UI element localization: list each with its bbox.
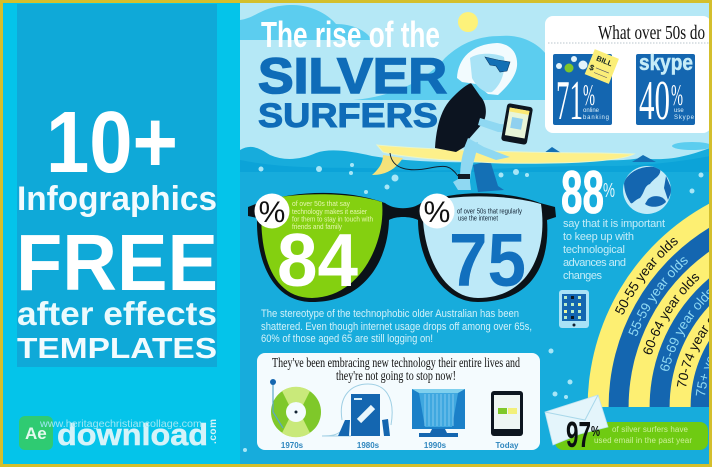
card background [553,54,612,125]
icon: CRT monitor [412,389,465,437]
glasses frame [248,193,556,302]
green pill [555,422,708,450]
band label: 50-55: 50-55 year olds [614,238,678,314]
percent sign: % [603,180,615,202]
chart: glasses statistics [248,193,556,302]
sky background [240,3,710,168]
title line: SILVER: SILVER [258,48,447,104]
rainbow bands [588,204,709,407]
right earphone [382,419,390,436]
leash cord [390,153,458,176]
panel: what over 50s do [545,16,711,133]
panel: water [240,142,712,465]
note paper [585,49,619,84]
cloud left [240,5,372,40]
icon: bill note [585,49,619,84]
promo text: after effects: after effects [17,295,217,332]
online label: online [583,108,600,114]
note heading: BILL [595,54,614,68]
value: 88: 88 [561,159,604,226]
left earphone [338,420,350,436]
card: skype: % [671,77,683,112]
fin [372,155,403,175]
headphone band [341,384,392,425]
globe ocean [623,166,671,214]
panel: promo [16,4,218,367]
globe land [624,167,672,207]
tablet body [491,391,523,436]
caption: to keep up with [563,231,634,243]
panel: technology timeline [257,353,540,450]
title [258,14,447,135]
Ae letters: Ae [25,424,47,443]
promo text: templates: TEMPLATES [17,333,217,365]
right percent badge [420,194,454,229]
panel background [545,16,711,133]
player clip [359,407,373,421]
wave peak right [632,155,656,162]
40 value: 40 [639,70,670,132]
caption: say that it is important [563,218,665,230]
left lens: green [261,194,382,298]
watermark url: www.heritagechristiancollage.com [39,419,202,430]
.com text: .com [208,419,219,444]
email caption [594,425,692,445]
right lens caption [457,206,522,222]
player body [351,394,380,436]
tablet green cell [498,408,507,414]
hand-held tablet [501,103,533,145]
left lens caption [292,199,373,231]
text block: stereotype: The stereotype of the technophobic older Australian has been [261,308,519,320]
darker wave band [240,156,710,172]
tone arm [273,382,283,428]
card: online banking: % [583,77,595,112]
banking label: banking [583,115,609,121]
logo: Ae download [19,416,219,452]
far leg [473,160,504,192]
title line: The rise of the: The rise of the [261,14,440,55]
label: 1990s: 1990s [424,441,447,450]
tablet screen [562,294,586,321]
label: today: Today [496,441,519,450]
tablet image [510,117,523,130]
cloud behind surfer [353,36,546,100]
download wordmark: download [57,417,208,452]
card: skype [636,50,695,132]
left lens caption: for them to stay in touch with [292,214,373,224]
tablet yellow cell [508,408,517,414]
promo text: Infographics: Infographics [17,180,217,218]
badge circle [420,194,454,228]
decorative dots [556,56,588,72]
card: online banking: 71 [556,70,583,132]
email caption: used email in the past year [594,436,692,445]
stat: 88 percent [561,159,672,282]
text block: stereotype: 60% of those aged 65 are still logging on! [261,333,433,345]
headphone cable [322,428,351,436]
player label [354,398,362,400]
near leg [453,142,478,190]
band label: 55-59: 55-59 year olds [628,257,688,336]
icon: cassette player [322,384,392,436]
card: online banking [553,49,619,132]
left lens caption: technology makes it easier [292,207,367,216]
monitor vents [425,394,453,426]
caption: changes [563,270,602,282]
record spindle [294,410,298,414]
panel background [257,353,540,450]
skype wordmark: skype [639,50,693,75]
monitor top edge [412,389,465,393]
note dollar: $ [588,63,596,73]
stat: email [545,395,708,455]
face [470,54,504,92]
caption: advances and [563,257,626,269]
badge symbol: % [259,196,285,229]
band label: 60-64: 60-64 year olds [643,274,700,354]
icon: tablet [491,391,523,436]
promo heading: 10+: 10+ [46,94,178,191]
promo heading: FREE: FREE [16,218,218,307]
right lens caption: use the internet [458,214,499,222]
badge circle [254,194,290,228]
card background [636,54,695,125]
monitor back [419,393,458,427]
promo backing block [17,4,217,367]
sunglasses [485,57,510,72]
record highlights [282,387,310,437]
label: 1980s: 1980s [357,441,380,450]
value: 97: 97 [566,414,591,455]
value: 75: 75 [449,218,526,302]
illustration: surfer [372,43,634,192]
wetsuit [435,83,486,152]
surfboard [377,145,634,163]
icon: sun [458,12,478,32]
tablet frame [559,290,589,328]
icon: vinyl record [270,379,321,437]
monitor stand [419,429,458,437]
skype label: Skype [674,115,695,121]
hair [457,43,517,95]
panel heading line 2: they're not going to stop now! [336,369,456,384]
badge symbol: % [424,196,450,229]
caption [563,218,665,282]
record centre [286,402,306,422]
panel: sky [240,3,710,168]
bubbles [243,163,704,452]
email caption: of silver surfers have [612,425,689,434]
monitor casing [412,389,465,429]
arm pivot [270,379,276,385]
record disc [271,387,321,437]
wave peak left [540,147,566,156]
tablet screen [494,395,520,429]
cloud wisp [672,142,712,150]
arm [478,118,528,133]
caption: technological [563,244,625,256]
value: 84: 84 [277,218,358,302]
label: 1970s: 1970s [281,441,304,450]
chart: age rainbow [588,204,709,407]
home button [572,324,576,326]
panel heading line 1: They've been embracing new technology their entire lives and [272,356,520,371]
tablet header [509,107,529,115]
right lens: pale blue [423,196,542,298]
icon: envelope [545,395,608,445]
icon: globe [623,166,672,214]
use label: use [674,108,684,114]
left lens caption: friends and family [292,222,342,231]
text block: stereotype [261,308,532,345]
tablet screen [505,107,529,139]
app grid [564,296,581,319]
tablet body [501,103,533,145]
title line: SURFERS: SURFERS [258,97,438,135]
icon: app tablet [559,290,589,328]
left lens caption: of over 50s that say [292,199,350,208]
icon: Ae badge [19,416,53,450]
text block: stereotype: shattered. Even though internet usage drops off among over 65s, [261,321,532,333]
ankle strap [458,174,470,179]
water surface [240,147,710,465]
left percent badge [254,194,290,229]
lower arm [464,138,510,160]
percent sign: % [591,423,600,440]
right lens caption: of over 50s that regularly [457,206,522,216]
envelope body [545,395,608,445]
envelope flap [545,395,598,420]
